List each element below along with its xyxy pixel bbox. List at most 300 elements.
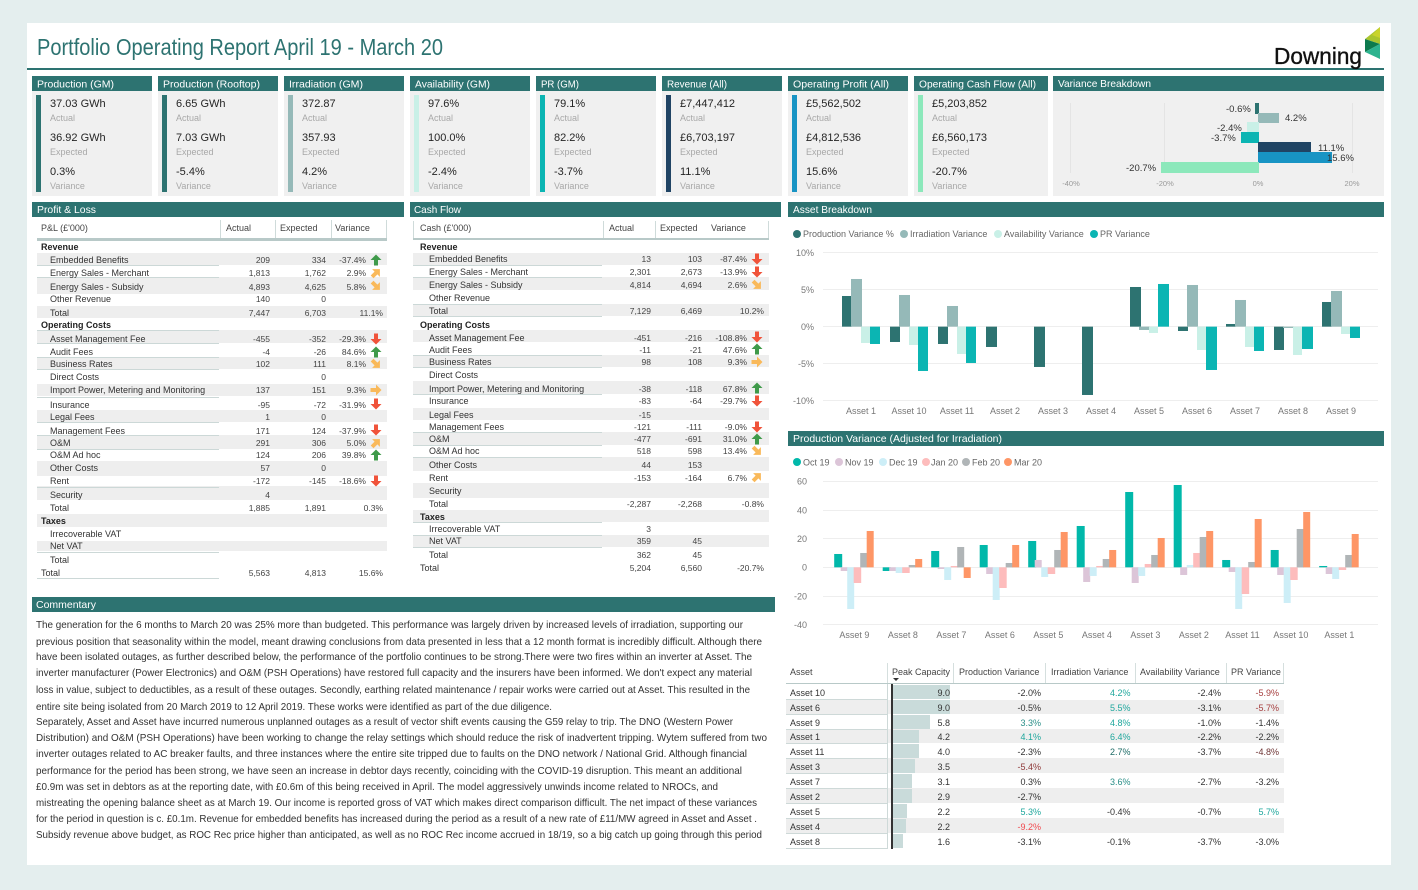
panel: cash flow table: 13.4% (723, 446, 747, 456)
KPI card: Irradiation (GM): Actual (302, 113, 327, 123)
panel: asset table: 5.7% (1258, 807, 1279, 817)
panel: variance breakdown chart: -2.4% (1217, 123, 1242, 134)
panel: variance breakdown chart: 11.1% (1318, 143, 1345, 154)
panel: profit and loss table: -18.6% (339, 476, 366, 486)
panel: asset table: 3.1 (937, 777, 950, 787)
panel: profit and loss table: Total (50, 308, 69, 318)
panel: cash flow table: -15 (639, 410, 651, 420)
panel: production variance chart: 0 (802, 562, 807, 572)
panel: asset breakdown chart: Asset 6 (1182, 406, 1212, 416)
KPI card: Operating Profit (All) (788, 76, 908, 196)
panel: profit and loss table: -26 (314, 347, 326, 357)
panel: cash flow table: Embedded Benefits (429, 254, 508, 264)
panel: cash flow table: 6,469 (681, 306, 702, 316)
panel: profit and loss table: 57 (261, 463, 270, 473)
panel: profit and loss table: Other Revenue (50, 294, 111, 304)
KPI card: Production (Rooftop): 6.65 GWh (176, 98, 226, 110)
panel: cash flow table: O&M (429, 434, 450, 444)
panel: asset table: -2.2% (1255, 732, 1279, 742)
KPI card: Irradiation (GM): Irradiation (GM) (289, 78, 363, 90)
panel: profit and loss table: Variance (335, 223, 370, 233)
bars: Asset 7 (1226, 300, 1264, 351)
panel: production variance chart: 40 (797, 506, 807, 516)
KPI card: Operating Profit (All): 15.6% (806, 166, 837, 178)
panel: asset table: -4.8% (1255, 747, 1279, 757)
panel: profit and loss table: -455 (253, 334, 270, 344)
KPI card: Production (Rooftop): 7.03 GWh (176, 132, 226, 144)
panel: cash flow table: 31.0% (723, 434, 747, 444)
panel: asset breakdown chart: Asset Breakdown (793, 204, 872, 216)
KPI card: Operating Cash Flow (All): £5,203,852 (932, 98, 987, 110)
panel: cash flow table: Import Power, Metering and Monitoring (429, 384, 584, 394)
panel: cash flow table: -108.8% (715, 333, 747, 343)
panel: cash flow table: Expected (660, 223, 698, 233)
bars: Asset 10 (890, 295, 928, 371)
panel: profit and loss table: 151 (312, 385, 326, 395)
KPI card: Irradiation (GM): Variance (302, 181, 337, 191)
panel: profit and loss table: 171 (256, 426, 270, 436)
panel: asset table: -2.4% (1197, 688, 1221, 698)
panel: profit and loss table: 4,625 (305, 282, 326, 292)
panel: profit and loss table: 4 (265, 490, 270, 500)
panel: profit and loss table: 1,885 (249, 503, 270, 513)
panel: profit and loss table: 137 (256, 385, 270, 395)
panel: asset table: -0.7% (1197, 807, 1221, 817)
panel: profit and loss table: Direct Costs (50, 372, 100, 382)
panel: cash flow table: Audit Fees (429, 345, 473, 355)
panel: profit and loss table: O&M Ad hoc (50, 450, 101, 460)
panel: asset table: -3.1% (1017, 837, 1041, 847)
panel: profit and loss table: 1,891 (305, 503, 326, 513)
panel: asset table: -5.4% (1017, 762, 1041, 772)
panel: profit and loss table: 2.9% (347, 268, 366, 278)
KPI card: PR (GM): -3.7% (554, 166, 583, 178)
panel: production variance chart: Asset 7 (936, 630, 966, 640)
panel: asset table: -2.7% (1017, 792, 1041, 802)
panel: commentary: Subsidy revenue above budget, as ROC Rec price higher than anticipated, as well as no ROC Rec income accrued in 18/19, so a big catch up going through this period (36, 830, 762, 841)
panel: asset table: Irradiation Variance (1051, 667, 1128, 677)
panel: production variance chart: Asset 11 (1225, 630, 1260, 640)
panel: variance breakdown chart: -3.7% (1211, 133, 1236, 144)
panel: cash flow table: 6,560 (681, 563, 702, 573)
KPI card: Production (GM): Actual (50, 113, 75, 123)
bars: Asset 11 (1222, 519, 1262, 609)
panel: cash flow table: Other Revenue (429, 293, 490, 303)
panel: cash flow table: Operating Costs (420, 320, 490, 330)
panel: profit and loss table: 4,813 (305, 568, 326, 578)
panel: cash flow table: -451 (634, 333, 651, 343)
panel: profit and loss table: Total (41, 568, 60, 578)
panel: asset breakdown chart: Asset 5 (1134, 406, 1164, 416)
panel: commentary: The generation for the 6 months to March 20 was 25% more than budgeted. This performance was largely driven by increased levels of irradiation, supporting our (36, 620, 744, 631)
bars: Asset 8 (1274, 327, 1313, 355)
panel: cash flow table: Energy Sales - Merchant (429, 267, 529, 277)
panel: asset table: -3.0% (1255, 837, 1279, 847)
panel: profit and loss table: O&M (50, 438, 71, 448)
panel: cash flow table: -2,287 (627, 499, 651, 509)
KPI card: Operating Cash Flow (All): Actual (932, 113, 957, 123)
KPI card: Production (GM) (32, 76, 152, 196)
panel: profit and loss table: Asset Management Fee (50, 334, 146, 344)
KPI card: Availability (GM): -2.4% (428, 166, 457, 178)
KPI card: Operating Cash Flow (All): Variance (932, 181, 967, 191)
bars: Asset 1 (842, 279, 880, 344)
panel: commentary (32, 597, 775, 841)
KPI card: Revenue (All): Actual (680, 113, 705, 123)
legend: asset breakdown: Irradiation Variance (910, 229, 987, 239)
KPI card: Availability (GM): Availability (GM) (415, 78, 490, 90)
panel: cash flow table (410, 202, 781, 573)
panel: profit and loss table: -72 (314, 400, 326, 410)
panel: cash flow table: 13 (642, 254, 651, 264)
panel: asset table: Asset 4 (790, 822, 820, 832)
KPI card: Revenue (All): £7,447,412 (680, 98, 735, 110)
panel: commentary: Distribution) and O&M (PSH Operations) have been working to change the relay settings which should reduce the risk of inadvertent tripping. Wytem suffered from two (36, 733, 767, 744)
panel: variance breakdown chart: Variance Breakdown (1058, 78, 1151, 90)
panel: cash flow table: 4,814 (630, 280, 651, 290)
KPI card: Availability (GM): Expected (428, 147, 466, 157)
panel: production variance chart: -20 (794, 592, 807, 602)
panel: production variance chart: 20 (797, 534, 807, 544)
panel: production variance chart: Asset 10 (1273, 630, 1308, 640)
KPI card: Operating Profit (All): £4,812,536 (806, 132, 861, 144)
KPI card: Availability (GM): Actual (428, 113, 453, 123)
panel: profit and loss table: Total (50, 555, 69, 565)
panel: cash flow table: -477 (634, 434, 651, 444)
panel: cash flow table: Cash Flow (414, 204, 461, 216)
bars: Asset 6 (980, 545, 1019, 600)
panel: cash flow table: 108 (688, 357, 702, 367)
KPI card: Operating Profit (All): Operating Profit (All) (793, 78, 889, 90)
panel: profit and loss table: Total (50, 503, 69, 513)
panel: production variance chart: 60 (797, 476, 807, 486)
panel: cash flow table: Energy Sales - Subsidy (429, 280, 523, 290)
KPI card: Production (GM): 36.92 GWh (50, 132, 106, 144)
panel: profit and loss table: 4,893 (249, 282, 270, 292)
panel: asset table: -2.2% (1197, 732, 1221, 742)
panel: commentary: have been isolated outages, as further described below, the performance of the portfolio continues to be strong.There were two fires within an inverter at Asset. The (36, 652, 752, 663)
panel: asset table: -3.2% (1255, 777, 1279, 787)
legend: asset breakdown: PR Variance (1100, 229, 1150, 239)
panel: profit and loss table: 124 (256, 450, 270, 460)
title: Portfolio Operating Report April 19 - March 20 (37, 34, 443, 60)
logo: Downing: Downing (1274, 43, 1362, 69)
panel: cash flow table: O&M Ad hoc (429, 446, 480, 456)
KPI card: Irradiation (GM): 4.2% (302, 166, 327, 178)
data bars: peak capacity (893, 685, 950, 848)
panel: cash flow table: 3 (646, 524, 651, 534)
bars: Asset 2 (986, 327, 997, 347)
panel: profit and loss table: 84.6% (342, 347, 366, 357)
panel: asset breakdown chart: 5% (801, 285, 814, 295)
legend: months: Nov 19 (845, 458, 874, 468)
panel: cash flow table: 98 (642, 357, 651, 367)
panel: profit and loss table: Actual (226, 223, 251, 233)
panel: asset table: Asset 7 (790, 777, 820, 787)
legend: months (793, 458, 1042, 468)
KPI card: Production (Rooftop) (158, 76, 278, 196)
panel: asset table: 4.2 (937, 732, 950, 742)
panel: profit and loss table: -4 (262, 347, 270, 357)
KPI card: Operating Profit (All): Actual (806, 113, 831, 123)
panel: cash flow table: 2,301 (630, 267, 651, 277)
panel: cash flow table: 153 (688, 460, 702, 470)
panel: cash flow table: Irrecoverable VAT (429, 524, 501, 534)
panel: cash flow table: -64 (690, 396, 702, 406)
KPI card: Irradiation (GM) (284, 76, 404, 196)
panel: profit and loss table: 1 (265, 412, 270, 422)
panel: asset breakdown chart: Asset 10 (891, 406, 927, 416)
panel: asset table: 2.2 (937, 822, 950, 832)
panel: cash flow table: 44 (642, 460, 651, 470)
KPI card: Production (Rooftop): Production (Rooftop) (163, 78, 260, 90)
KPI card: Production (GM): 0.3% (50, 166, 75, 178)
panel: profit and loss table: 5,563 (249, 568, 270, 578)
panel: asset table: -3.7% (1197, 747, 1221, 757)
panel: cash flow table: -111 (686, 422, 702, 432)
KPI card: Operating Cash Flow (All) (914, 76, 1048, 196)
panel: asset breakdown chart: -10% (793, 396, 814, 406)
panel: asset table: 5.3% (1020, 807, 1041, 817)
panel: profit and loss table: 0 (321, 412, 326, 422)
panel: cash flow table: 359 (637, 536, 651, 546)
panel: asset table: -2.3% (1017, 747, 1041, 757)
panel: profit and loss table: Business Rates (50, 359, 113, 369)
panel: profit and loss table: 306 (312, 438, 326, 448)
panel: profit and loss table: 140 (256, 294, 270, 304)
panel: asset table: 3.3% (1020, 718, 1041, 728)
KPI card: Availability (GM): Variance (428, 181, 463, 191)
panel: asset table: 0.3% (1020, 777, 1041, 787)
panel: commentary: inverter manufacturer (Power Electronics) and O&M (PSH Operations) have restored full capacity and the insurers have been informed. We don't expect any material (36, 668, 752, 679)
KPI card: PR (GM): Variance (554, 181, 589, 191)
KPI card: Production (GM): Expected (50, 147, 88, 157)
panel: profit and loss table: 1,762 (305, 268, 326, 278)
bars: Asset 5 (1130, 284, 1169, 333)
panel: asset table: PR Variance (1231, 667, 1281, 677)
panel: cash flow table: Net VAT (429, 536, 462, 546)
panel: profit and loss table: 291 (256, 438, 270, 448)
panel: asset table: Asset 5 (790, 807, 820, 817)
panel: cash flow table: 2.6% (728, 280, 747, 290)
panel: profit and loss table: Other Costs (50, 463, 99, 473)
panel: cash flow table: 9.3% (728, 357, 747, 367)
bars: Asset 4 (1082, 327, 1093, 395)
panel: profit and loss table: 209 (256, 255, 270, 265)
panel: variance breakdown chart: 20% (1344, 179, 1360, 188)
panel: profit and loss table: 5.8% (347, 282, 366, 292)
legend: months: Feb 20 (972, 458, 1000, 468)
panel: profit and loss table: Embedded Benefits (50, 255, 129, 265)
panel: variance breakdown chart: -40% (1062, 179, 1080, 188)
panel: profit and loss table: 6,703 (305, 308, 326, 318)
panel: production variance chart: Asset 2 (1179, 630, 1209, 640)
KPI card: PR (GM): Expected (554, 147, 592, 157)
KPI card: Production (GM): Variance (50, 181, 85, 191)
bars: Asset 9 (834, 531, 874, 609)
panel: asset table: Asset 8 (790, 837, 820, 847)
panel: cash flow table: Actual (609, 223, 634, 233)
panel: profit and loss table: 0.3% (364, 503, 383, 513)
KPI card: PR (GM): 79.1% (554, 98, 585, 110)
panel: profit and loss table: 124 (312, 426, 326, 436)
KPI card: Operating Cash Flow (All): Operating Cash Flow (All) (919, 78, 1036, 90)
panel: asset table: -3.1% (1197, 703, 1221, 713)
panel: variance breakdown chart: 0% (1253, 179, 1264, 188)
panel: cash flow table: -153 (634, 473, 651, 483)
panel: profit and loss table: -352 (309, 334, 326, 344)
panel: cash flow table: Total (429, 550, 448, 560)
legend: asset breakdown: Availability Variance (1004, 229, 1084, 239)
panel: cash flow table: -29.7% (720, 396, 747, 406)
panel: cash flow table: Business Rates (429, 357, 492, 367)
panel: profit and loss table: 15.6% (359, 568, 383, 578)
bars: Asset 5 (1028, 532, 1068, 577)
panel: cash flow table: Cash (£'000) (420, 223, 471, 233)
panel: asset table: Asset 1 (790, 732, 820, 742)
legend: asset breakdown: Production Variance % (803, 229, 894, 239)
panel: cash flow table: -216 (685, 333, 702, 343)
KPI card: Revenue (All): £6,703,197 (680, 132, 735, 144)
KPI card: Availability (GM): 97.6% (428, 98, 459, 110)
panel: asset table: 5.5% (1110, 703, 1130, 713)
bars: Asset 4 (1077, 526, 1116, 582)
KPI card: Production (Rooftop): Variance (176, 181, 211, 191)
KPI card: PR (GM) (536, 76, 656, 196)
panel: variance breakdown chart: 15.6% (1327, 153, 1354, 164)
panel: production variance chart: -40 (794, 620, 807, 630)
panel: asset breakdown chart: Asset 3 (1038, 406, 1068, 416)
panel: profit and loss table (32, 202, 404, 578)
panel: asset table: 2.9 (937, 792, 950, 802)
panel: cash flow table: -164 (685, 473, 702, 483)
panel: asset table: Asset (790, 667, 813, 677)
panel: asset breakdown chart: Asset 1 (846, 406, 876, 416)
panel: asset table: 4.1% (1020, 732, 1041, 742)
bars: Asset 11 (938, 306, 976, 363)
panel: asset table: Asset 11 (790, 747, 824, 757)
panel: profit and loss table: 5.0% (347, 438, 366, 448)
panel: asset table: -3.7% (1197, 837, 1221, 847)
panel: cash flow table: 2,673 (681, 267, 702, 277)
panel: cash flow table: -121 (634, 422, 651, 432)
panel: cash flow table: -0.8% (742, 499, 764, 509)
panel: commentary: mistreating the opening balance sheet as at March 19. Our income is reported gross of VAT which makes direct comparison difficult. The net impact of these variances (36, 798, 757, 809)
KPI card: Production (GM): Production (GM) (37, 78, 114, 90)
panel: asset table: Asset 9 (790, 718, 820, 728)
panel: cash flow table: 518 (637, 446, 651, 456)
KPI card: Irradiation (GM): 357.93 (302, 132, 336, 144)
panel: cash flow table: Taxes (420, 512, 445, 522)
bars: Asset 9 (1322, 291, 1360, 338)
bars: Asset 1 (1319, 534, 1359, 579)
panel: profit and loss table: Irrecoverable VAT (50, 529, 122, 539)
logo: Downing (1274, 27, 1380, 69)
panel: asset table: 2.2 (937, 807, 950, 817)
panel: profit and loss table: Profit & Loss (37, 204, 96, 216)
panel: cash flow table: Direct Costs (429, 370, 479, 380)
panel: asset breakdown chart: Asset 11 (940, 406, 974, 416)
bars: Asset 10 (1271, 512, 1310, 603)
panel: cash flow table: 7,129 (630, 306, 651, 316)
panel: profit and loss table: 7,447 (249, 308, 270, 318)
bars: Asset 3 (1125, 492, 1165, 583)
panel: cash flow table: Other Costs (429, 460, 478, 470)
panel: profit and loss table: 0 (321, 372, 326, 382)
panel: asset breakdown chart: -5% (798, 359, 814, 369)
panel: production variance chart: Asset 6 (985, 630, 1015, 640)
KPI card: Operating Profit (All): Variance (806, 181, 841, 191)
panel: profit and loss table: Net VAT (50, 541, 83, 551)
panel: cash flow table: -87.4% (720, 254, 747, 264)
panel: profit and loss table: -37.4% (339, 255, 366, 265)
panel: profit and loss table: -29.3% (339, 334, 366, 344)
panel: cash flow table: -13.9% (720, 267, 747, 277)
panel: profit and loss table: Management Fees (50, 426, 126, 436)
KPI card: Operating Profit (All): £5,562,502 (806, 98, 861, 110)
panel: profit and loss table: 206 (312, 450, 326, 460)
panel: asset breakdown chart: 0% (801, 322, 814, 332)
legend: months: Dec 19 (889, 458, 918, 468)
panel: profit and loss table: 8.1% (347, 359, 366, 369)
panel: profit and loss table: Legal Fees (50, 412, 95, 422)
panel: commentary: inverter outages related to AC breaker faults, and three instances where the entire site tripped due to faults on the DNO network / National Grid. Although financial (36, 749, 747, 760)
KPI card: Production (GM): 37.03 GWh (50, 98, 106, 110)
panel: profit and loss table: 0 (321, 294, 326, 304)
panel: variance breakdown chart: -20% (1156, 179, 1174, 188)
panel: profit and loss table: Security (50, 490, 83, 500)
KPI card: Operating Cash Flow (All): -20.7% (932, 166, 967, 178)
panel: profit and loss table: 39.8% (342, 450, 366, 460)
panel: asset table: -0.4% (1107, 807, 1130, 817)
panel: asset table: 1.6 (937, 837, 950, 847)
panel: profit and loss table: 334 (312, 255, 326, 265)
panel: profit and loss table: Import Power, Metering and Monitoring (50, 385, 205, 395)
panel: variance breakdown chart: -0.6% (1226, 104, 1251, 115)
panel: cash flow table: Insurance (429, 396, 469, 406)
panel: profit and loss table: Taxes (41, 516, 66, 526)
panel: production variance chart (788, 431, 1384, 640)
panel: profit and loss table: Energy Sales - Merchant (50, 268, 150, 278)
panel: cash flow table: Total (429, 306, 448, 316)
panel: cash flow table: -2,268 (678, 499, 702, 509)
panel: profit and loss table: -95 (258, 400, 270, 410)
panel: production variance chart: Production Variance (Adjusted for Irradiation) (793, 433, 1002, 445)
panel: profit and loss table: 0 (321, 463, 326, 473)
panel: cash flow table: 45 (693, 536, 702, 546)
panel: asset table: -0.5% (1017, 703, 1041, 713)
KPI card: Revenue (All): 11.1% (680, 166, 711, 178)
panel: commentary: performance for the period has been strong, we have seen an increase in debtor days recently, coinciding with the COVID-19 disruption. This meant an additional (36, 766, 742, 777)
panel: cash flow table: 6.7% (728, 473, 747, 483)
panel: asset table: Availability Variance (1140, 667, 1220, 677)
panel: commentary: loss in value, subject to deductibles, as a result of these outages. Secondly, earthing related maintenance / repair works were carried out at Asset. This resulted in the (36, 685, 750, 696)
panel: variance breakdown chart: -20.7% (1126, 163, 1157, 174)
KPI card: PR (GM): PR (GM) (541, 78, 579, 90)
legend: months: Oct 19 (803, 458, 830, 468)
panel: profit and loss table: 111 (313, 359, 326, 369)
bars: Asset 7 (931, 547, 971, 580)
panel: asset table: -2.0% (1017, 688, 1041, 698)
bars: Asset 8 (883, 559, 922, 573)
panel: profit and loss table: 102 (256, 359, 270, 369)
panel: commentary: £0.9m was set in debtors as at the reporting date, with £0.6m of this being received in April. The model aggressively unwinds income related to NROCs, and (36, 782, 718, 793)
KPI card: Revenue (All): Expected (680, 147, 718, 157)
panel: asset table: Asset 2 (790, 792, 820, 802)
panel: cash flow table: Rent (429, 473, 449, 483)
legend: months: Jan 20 (931, 458, 958, 468)
panel: profit and loss table: Rent (50, 476, 70, 486)
